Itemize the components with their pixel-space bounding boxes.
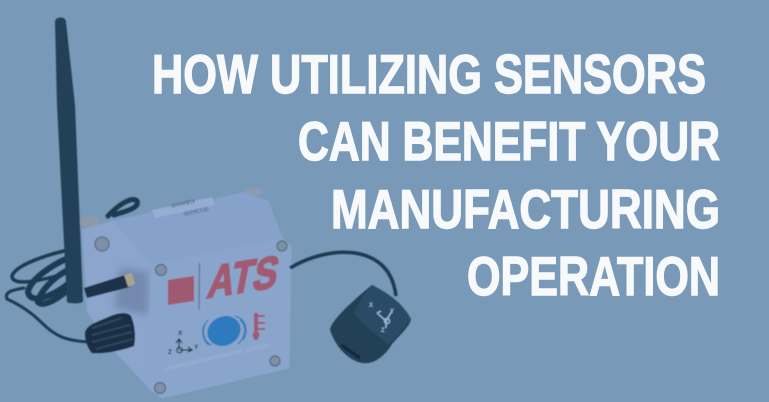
axis icon: Z [168, 349, 172, 356]
axis icon [168, 330, 199, 356]
cable gland [85, 313, 135, 353]
sensor box: top [115, 193, 283, 265]
vibration icon [202, 311, 246, 351]
serial label: 0013A200 [183, 205, 209, 216]
logo square [168, 276, 194, 305]
logo text: ATS [204, 246, 283, 308]
probe sensor [330, 285, 411, 363]
antenna connector [84, 273, 135, 298]
sensor box: front face [150, 240, 290, 397]
probe cable [290, 252, 396, 296]
shaded connector recess [114, 268, 148, 315]
probe axis marks: X [369, 303, 373, 309]
illustration: ATS wireless sensor [6, 18, 411, 397]
title [152, 43, 720, 307]
screws [95, 237, 287, 394]
sensor box: flange side [83, 221, 152, 388]
probe axis marks [369, 303, 394, 334]
axis icon: Y [194, 344, 199, 351]
thermometer icon [252, 313, 265, 340]
sensor caption: VIBRATION/TEMPERATURE SENSOR [164, 343, 271, 373]
probe axis marks: Z [381, 328, 385, 334]
cable bundle behind sensor [6, 200, 137, 342]
serial label: 41BAHH5 [170, 197, 196, 208]
back screws [80, 216, 100, 228]
ATS logo [168, 246, 283, 310]
antenna [55, 18, 83, 303]
axis icon: X [178, 330, 183, 337]
serial label [152, 197, 215, 218]
probe axis marks: Y [390, 309, 394, 315]
